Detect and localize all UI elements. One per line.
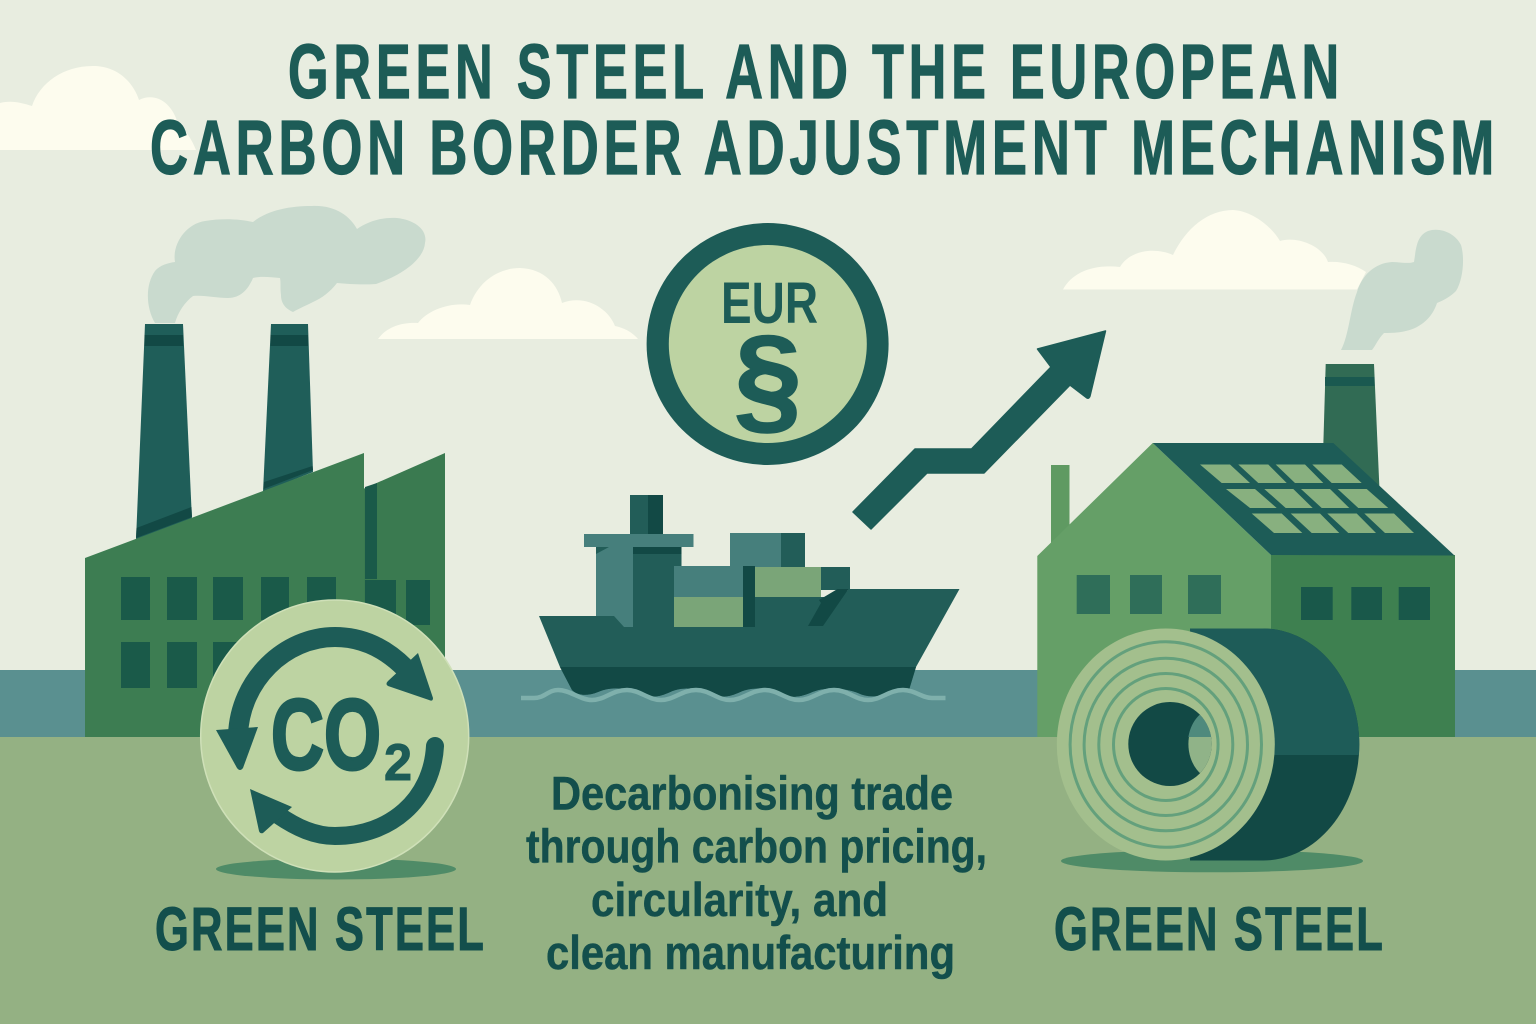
coil body: [1190, 628, 1359, 860]
shadow under steel coil: [1061, 850, 1363, 872]
right face: [1271, 555, 1455, 737]
left gable face: [1037, 443, 1271, 737]
coil front face: [1057, 628, 1275, 860]
hull waterline band: [560, 667, 916, 697]
factory windows: [121, 577, 430, 688]
deck shadow: [808, 589, 848, 626]
central caption: clean manufacturing: [546, 926, 955, 979]
CO2 label: CO: [271, 679, 381, 791]
title: [150, 29, 1499, 191]
shadow under CO2 badge: [216, 858, 456, 880]
central caption: circularity, and: [591, 873, 888, 926]
small vent stack: [1051, 465, 1070, 545]
water ripple: [521, 690, 946, 700]
CO2 label: 2: [384, 734, 412, 792]
coil rings: [1070, 642, 1262, 847]
right face windows: [1301, 587, 1430, 620]
sky background: [0, 0, 1536, 672]
chimney 1: [136, 324, 192, 540]
left face windows: [1077, 575, 1221, 614]
top circular arrow: [216, 637, 433, 770]
smoke: left factory: [148, 206, 425, 323]
cloud: top left: [0, 66, 196, 150]
water band: [0, 670, 1536, 738]
EUR coin: [647, 223, 889, 465]
EUR coin: EUR: [721, 271, 818, 336]
superstructure: [584, 534, 694, 627]
rear building: [363, 453, 445, 737]
coil hole: [1128, 702, 1212, 786]
smoke: right factory: [1341, 230, 1463, 350]
coil body lit upper part: [1190, 628, 1360, 755]
containers: [674, 533, 850, 627]
ground: [0, 737, 1536, 1024]
central caption: [526, 766, 987, 979]
panel: left factory: [85, 324, 445, 737]
cargo ship: [539, 495, 960, 697]
rising arrow: [853, 331, 1106, 529]
central caption: through carbon pricing,: [526, 820, 987, 873]
bottom circular arrow: [250, 746, 435, 836]
chimney 2: [263, 324, 313, 492]
EUR coin: §: [734, 310, 802, 446]
cloud: centre: [378, 268, 638, 339]
CO2 circular badge: [201, 600, 469, 872]
hull: [539, 589, 960, 697]
central caption: Decarbonising trade: [551, 766, 953, 820]
panel: right factory: [1037, 364, 1455, 737]
funnel: [630, 495, 663, 535]
cloud: right: [1063, 210, 1366, 290]
main building: [85, 453, 364, 737]
label: left green steel: GREEN STEEL: [155, 895, 486, 963]
roof: [1153, 443, 1454, 556]
label: right green steel: GREEN STEEL: [1054, 895, 1385, 963]
chimney: [1322, 364, 1380, 490]
solar panels: [1200, 464, 1414, 533]
steel coil: [1057, 628, 1359, 860]
